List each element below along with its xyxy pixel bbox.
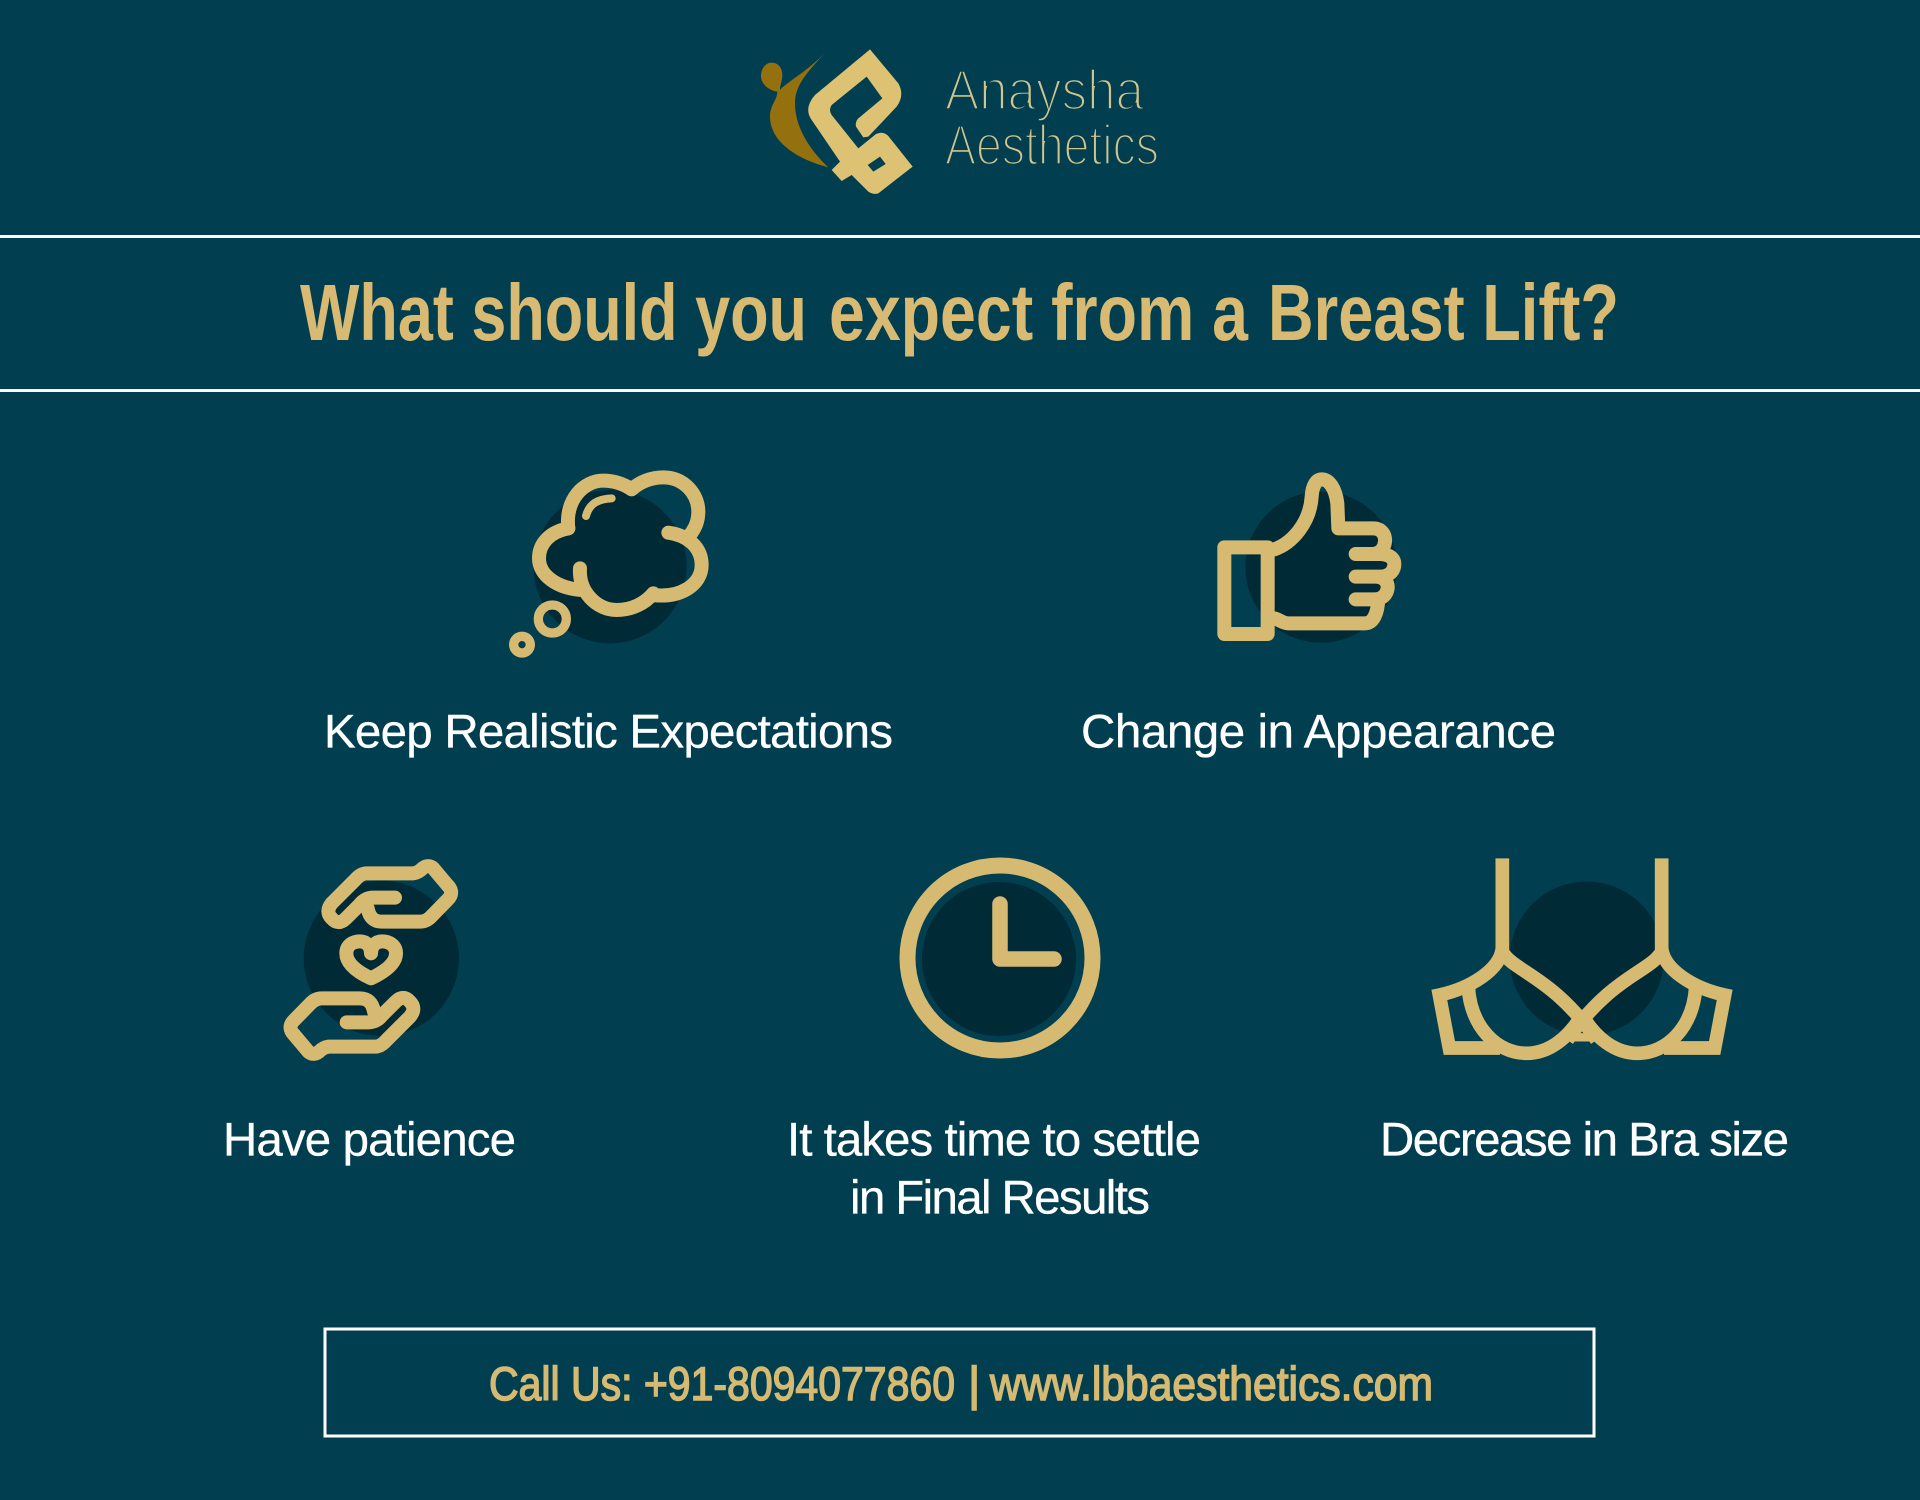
icon: clock	[908, 866, 1092, 1050]
contact text	[489, 1358, 1433, 1411]
contact text: |	[968, 1358, 980, 1411]
icon: thought cloud	[514, 477, 702, 653]
contact text: Call Us: +91-8094077860	[489, 1358, 955, 1411]
icon: logo mark	[761, 49, 913, 194]
item: Have patience	[223, 866, 516, 1166]
label: Keep Realistic Expectations	[324, 706, 893, 758]
logo	[761, 49, 1159, 194]
contact text: www.lbbaesthetics.com	[989, 1358, 1433, 1411]
label line 1: It takes time to settle	[787, 1114, 1201, 1166]
item: It takes time to settle in Final Results	[787, 866, 1201, 1224]
icon: hands and heart	[290, 866, 459, 1054]
label: Decrease in Bra size	[1380, 1114, 1789, 1166]
item: Keep Realistic Expectations	[324, 477, 893, 758]
contact box	[325, 1329, 1594, 1436]
icon: bra	[1439, 858, 1725, 1053]
label: Have patience	[223, 1114, 516, 1166]
title: expect from a	[829, 268, 1248, 357]
title: What should you	[300, 268, 807, 357]
icon: thumbs up	[1224, 479, 1397, 643]
label: Change in Appearance	[1081, 706, 1556, 758]
logo text: Anaysha: Anaysha	[945, 58, 1144, 122]
label line 2: in Final Results	[850, 1172, 1150, 1224]
title	[300, 268, 1619, 357]
title: Breast Lift?	[1268, 268, 1619, 357]
logo text: Aesthetics: Aesthetics	[945, 114, 1159, 178]
item: Change in Appearance	[1081, 479, 1556, 758]
item: Decrease in Bra size	[1380, 858, 1789, 1166]
